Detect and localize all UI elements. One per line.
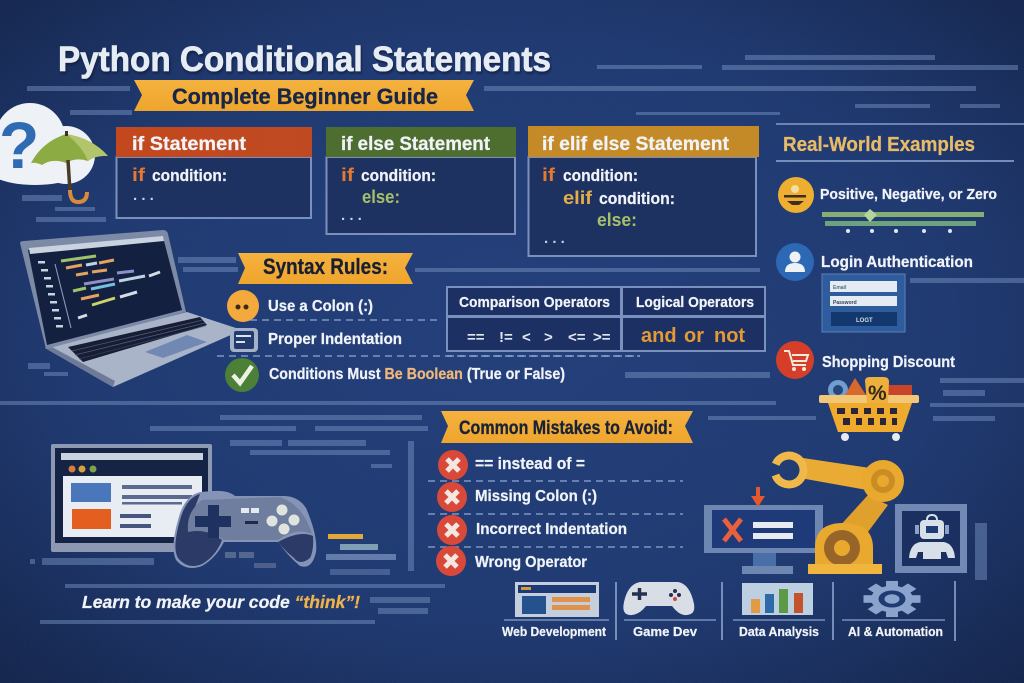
icon: question cloud and umbrella bbox=[0, 103, 108, 202]
rule: use a colon bbox=[227, 290, 373, 322]
panel: if else statement bbox=[326, 127, 516, 234]
table: comparison and logical operators: and bbox=[641, 325, 677, 347]
title: Python Conditional Statements bbox=[58, 40, 551, 79]
banner: subtitle: Complete Beginner Guide bbox=[172, 84, 438, 109]
category: web development bbox=[502, 582, 609, 639]
example: login authentication: Email bbox=[833, 285, 847, 291]
panel: if else statement: if else Statement bbox=[341, 134, 491, 155]
panel: if else statement: . . . bbox=[341, 207, 362, 224]
mistake: wrong operator: Wrong Operator bbox=[475, 554, 587, 571]
example: positive, negative, or zero bbox=[778, 177, 997, 233]
example: shopping discount bbox=[776, 341, 956, 379]
mistake: == instead of = bbox=[438, 450, 585, 480]
panel: if elif else statement: . . . bbox=[544, 230, 565, 247]
example: login authentication bbox=[776, 243, 973, 332]
mistake: incorrect indentation bbox=[437, 515, 627, 545]
banner: syntax rules bbox=[238, 253, 413, 284]
category: game dev bbox=[623, 582, 716, 639]
table: comparison and logical operators: not bbox=[714, 325, 745, 347]
illustration: browser window bbox=[51, 444, 212, 552]
table: comparison and logical operators: or bbox=[684, 325, 704, 347]
panel: if statement: if Statement bbox=[132, 134, 247, 155]
icon: question cloud and umbrella: ? bbox=[0, 108, 39, 182]
icon: shopping basket with percent tag: % bbox=[868, 382, 887, 405]
table: comparison and logical operators: <= bbox=[568, 329, 586, 346]
mistake: wrong operator bbox=[436, 546, 587, 576]
icon: shopping basket with percent tag bbox=[819, 377, 919, 441]
panel: if statement: condition: bbox=[152, 166, 227, 185]
illustration: monitor with error bbox=[704, 487, 823, 574]
rule: conditions must be boolean bbox=[225, 358, 565, 392]
panel: if statement: if bbox=[132, 165, 146, 185]
panel: if else statement: else: bbox=[362, 187, 400, 207]
panel: if elif else statement: elif bbox=[563, 188, 593, 208]
example: positive, negative, or zero: Positive, Negative, or Zero bbox=[820, 186, 997, 203]
panel: if statement: . . . bbox=[133, 187, 154, 204]
illustration: robot arm bbox=[770, 451, 904, 574]
icon: laptop bbox=[20, 230, 242, 387]
table: comparison and logical operators: Logical Operators bbox=[636, 294, 754, 311]
panel: if elif else statement: else: bbox=[597, 210, 637, 230]
illustration: game controller bbox=[173, 491, 396, 575]
table: comparison and logical operators: == bbox=[467, 329, 485, 346]
example: login authentication: Password bbox=[833, 300, 857, 306]
panel: if elif else statement: condition: bbox=[563, 166, 638, 185]
category: data analysis bbox=[733, 583, 825, 639]
table: comparison and logical operators bbox=[447, 287, 765, 351]
rule: conditions must be boolean: Conditions Must Be Boolean (True or False) bbox=[269, 366, 565, 383]
panel: if statement bbox=[116, 127, 312, 218]
rule: use a colon: Use a Colon (:) bbox=[268, 298, 373, 315]
category: web development: Web Development bbox=[502, 625, 607, 639]
banner: syntax rules: Syntax Rules: bbox=[263, 254, 388, 279]
table: comparison and logical operators: != bbox=[499, 329, 513, 346]
heading: real-world examples: Real-World Examples bbox=[783, 134, 975, 156]
mistake: missing colon: Missing Colon (:) bbox=[475, 488, 597, 505]
panel: if elif else statement: if elif else Statement bbox=[542, 134, 730, 155]
illustration: robot icon bbox=[895, 504, 967, 573]
list: mistakes bbox=[428, 450, 683, 576]
table: comparison and logical operators: Comparison Operators bbox=[459, 294, 610, 311]
category: ai & automation bbox=[842, 581, 945, 639]
mistake: incorrect indentation: Incorrect Indentation bbox=[476, 521, 627, 538]
table: comparison and logical operators: >= bbox=[593, 329, 611, 346]
panel: if elif else statement: if bbox=[542, 165, 556, 185]
tagline: Learn to make your code “think”! bbox=[82, 592, 360, 612]
rule: proper indentation bbox=[230, 328, 402, 352]
category: game dev: Game Dev bbox=[633, 625, 697, 639]
category: ai & automation: AI & Automation bbox=[848, 625, 943, 639]
banner: subtitle bbox=[134, 80, 474, 111]
example: login authentication: Login Authentication bbox=[821, 254, 973, 271]
panel: if else statement: condition: bbox=[361, 166, 436, 185]
example: login authentication: LOGT bbox=[856, 318, 873, 324]
mistake: == instead of =: == instead of = bbox=[475, 454, 585, 473]
panel: if elif else statement: condition: bbox=[599, 189, 675, 208]
table: comparison and logical operators: > bbox=[544, 329, 553, 346]
example: shopping discount: Shopping Discount bbox=[822, 354, 956, 371]
panel: if else statement: if bbox=[341, 165, 355, 185]
category: data analysis: Data Analysis bbox=[739, 625, 819, 639]
panel: if elif else statement bbox=[528, 126, 759, 256]
table: comparison and logical operators: < bbox=[522, 329, 531, 346]
banner: common mistakes: Common Mistakes to Avoid: bbox=[459, 418, 673, 439]
rule: proper indentation: Proper Indentation bbox=[268, 331, 402, 348]
mistake: missing colon bbox=[437, 482, 597, 512]
banner: common mistakes bbox=[441, 411, 693, 443]
